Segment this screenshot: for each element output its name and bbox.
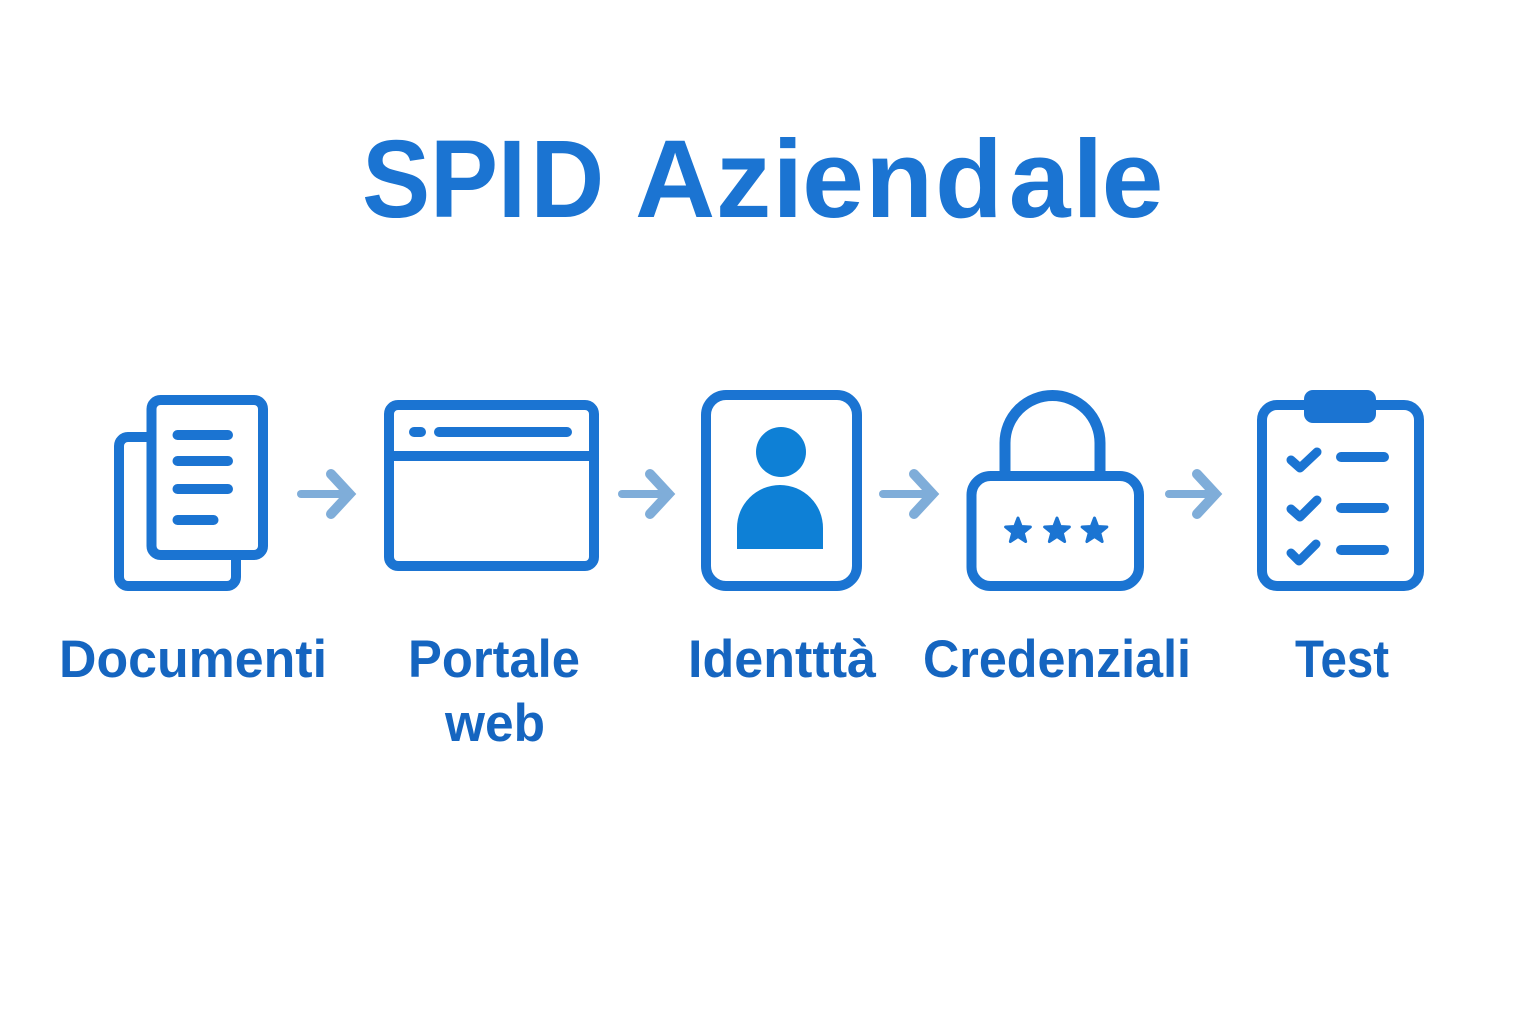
- label: Identità: Identttà: [688, 630, 877, 689]
- arrow: identity to credentials: [883, 474, 932, 514]
- label: Portale web: [408, 630, 580, 753]
- icon: checklist clipboard: [1262, 390, 1419, 586]
- label: Documenti: Documenti: [59, 630, 327, 689]
- icon: web portal: [389, 405, 594, 566]
- label: Portale web: Portale: [408, 630, 580, 689]
- arrow: documents to portal: [301, 474, 350, 514]
- label: Portale web: web: [444, 694, 545, 753]
- arrow: credentials to test: [1169, 474, 1216, 514]
- label: Credenziali: Credenziali: [923, 630, 1191, 689]
- title: Aziendale: [635, 118, 1163, 241]
- label: Test: Test: [1295, 630, 1389, 689]
- arrow: portal to identity: [622, 474, 668, 514]
- title: SPID: [362, 118, 604, 241]
- icon: documents: [119, 400, 263, 586]
- icon: identity card: [706, 395, 857, 586]
- icon: padlock with stars: [972, 396, 1139, 586]
- title: [362, 118, 1163, 241]
